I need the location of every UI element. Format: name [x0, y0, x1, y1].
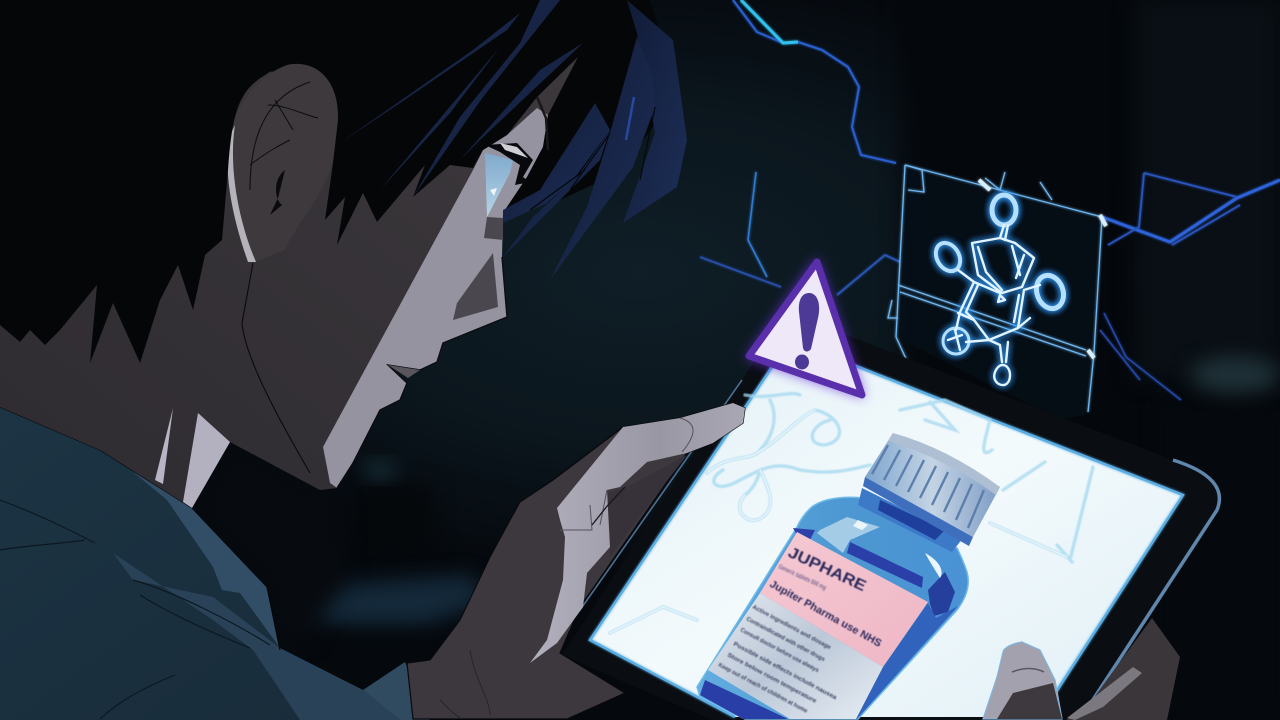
hologram: molecule panel — [888, 165, 1106, 420]
bottle body — [697, 497, 968, 719]
person: face, ear, hair and eye — [0, 0, 687, 508]
label text: Contraindicated with other drugs — [745, 616, 826, 663]
face shadow — [0, 57, 578, 508]
face lit plane — [323, 108, 548, 488]
label text: JUPHARE — [785, 544, 869, 595]
label text: Possible side effects include nausea — [732, 641, 838, 702]
label text — [717, 544, 884, 715]
white label — [708, 593, 883, 719]
tablet — [562, 325, 1219, 720]
shirt: shoulder and collar — [0, 407, 430, 720]
label text: Consult doctor before use always — [739, 627, 820, 674]
black collar shadow — [192, 442, 345, 650]
neck highlights — [155, 408, 173, 484]
ear — [228, 61, 338, 262]
mouth and chin lines — [337, 257, 507, 488]
bottle cap — [863, 433, 1000, 546]
medication bottle — [697, 433, 1000, 719]
label text: Jupiter Pharma use NHS — [768, 578, 884, 650]
bottle highlights — [853, 520, 942, 578]
hand holding tablet, left — [407, 403, 745, 719]
cheek shadow — [453, 253, 498, 320]
bottle neck — [858, 488, 963, 552]
hand holding tablet, right — [983, 618, 1180, 720]
pink label — [760, 532, 928, 667]
blue hair strands — [340, 0, 687, 280]
molecule diagram — [931, 195, 1068, 385]
tablet screen — [590, 340, 1183, 717]
label text: Generic tablets 500 mg — [777, 563, 827, 592]
black hair mass — [0, 0, 668, 363]
hologram: circuit lines — [700, 0, 1280, 400]
icon: warning triangle — [746, 257, 865, 398]
tablet bezel — [562, 325, 1218, 720]
eye with tear — [485, 153, 513, 217]
label text: Keep out of reach of children at home — [717, 662, 809, 715]
label text: Active ingredients and dosage — [751, 604, 832, 651]
ghost molecule on screen — [610, 394, 1093, 633]
label text: Store below room temperature — [726, 652, 818, 705]
